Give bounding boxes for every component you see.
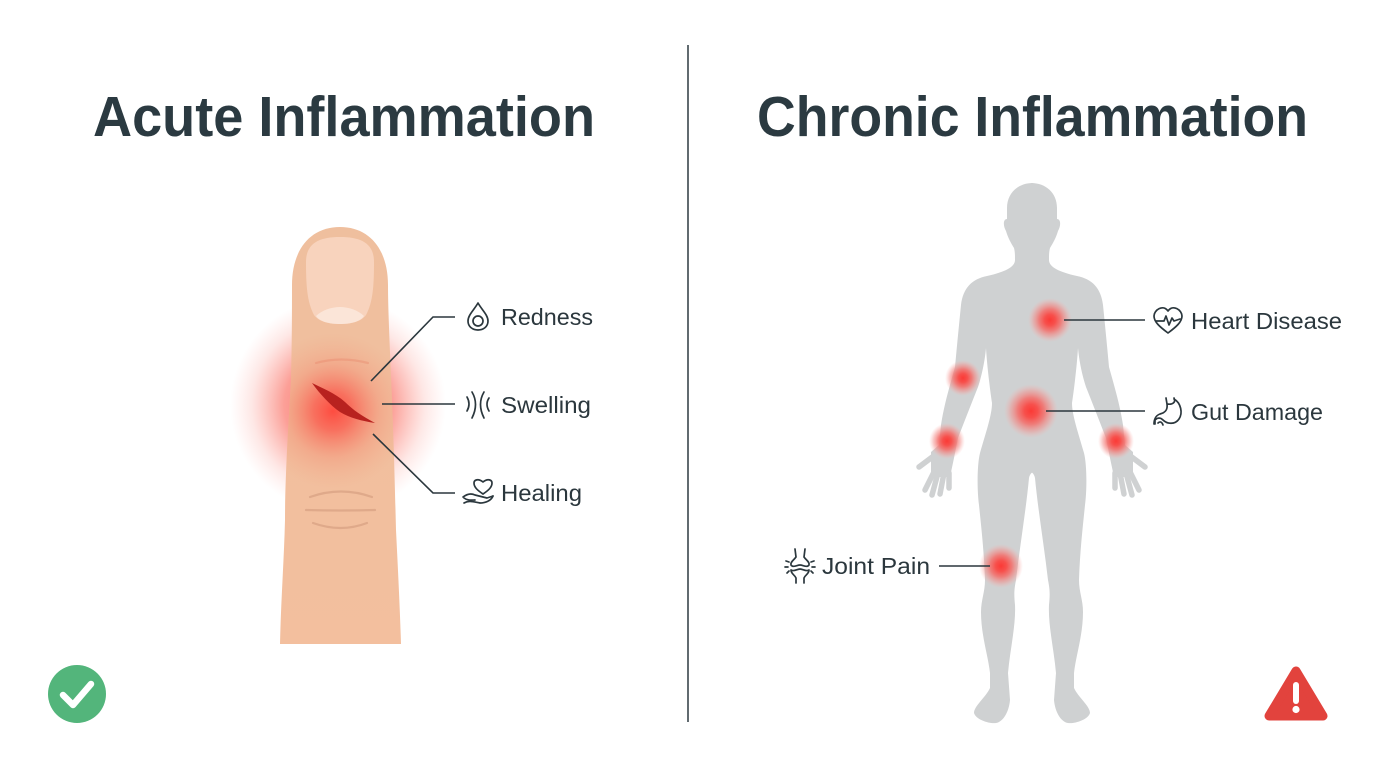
body silhouette bbox=[919, 183, 1145, 723]
badge: warning triangle bbox=[1269, 671, 1323, 716]
panel: chronic body illustration bbox=[919, 183, 1145, 723]
label: Gut Damage: Gut Damage bbox=[1191, 399, 1323, 425]
knuckle creases bbox=[306, 360, 375, 528]
label: Swelling: Swelling bbox=[501, 392, 591, 418]
icon: stomach bbox=[1154, 398, 1181, 425]
hotspot: abdomen bbox=[1004, 384, 1058, 438]
callout: Gut Damage bbox=[1046, 398, 1323, 425]
fingernail bbox=[306, 237, 374, 324]
callout: Healing bbox=[373, 434, 582, 506]
badge: green check bbox=[48, 665, 106, 723]
callout: Redness bbox=[371, 303, 593, 381]
label: Heart Disease: Heart Disease bbox=[1191, 308, 1342, 334]
hotspot: forearm bbox=[945, 360, 981, 396]
hotspot: left wrist bbox=[929, 423, 965, 459]
title: Acute Inflammation: Acute Inflammation bbox=[93, 85, 595, 149]
wound cut bbox=[312, 383, 375, 423]
icon: heart in hand bbox=[463, 480, 493, 503]
icon: heart with pulse bbox=[1154, 308, 1182, 333]
callout: Joint Pain bbox=[785, 549, 990, 583]
label: Redness: Redness bbox=[501, 304, 593, 330]
callout: Heart Disease bbox=[1064, 308, 1342, 334]
label: Healing: Healing bbox=[501, 480, 582, 506]
finger bbox=[280, 227, 401, 644]
divider between panels bbox=[687, 45, 689, 722]
nail lunula bbox=[316, 307, 364, 324]
panel: acute finger illustration bbox=[230, 227, 446, 644]
hotspot: right wrist bbox=[1098, 423, 1134, 459]
title: Chronic Inflammation: Chronic Inflammation bbox=[757, 85, 1308, 149]
icon: water drop bbox=[468, 303, 488, 330]
icon: knee joint bbox=[785, 549, 815, 583]
hotspot: chest bbox=[1028, 298, 1072, 342]
label: Joint Pain: Joint Pain bbox=[822, 553, 930, 579]
icon: swelling arcs bbox=[467, 392, 489, 418]
callout: Swelling bbox=[382, 392, 591, 418]
inner inflammation glow on finger bbox=[287, 349, 392, 474]
hotspot: knee bbox=[979, 544, 1023, 588]
outer inflammation glow bbox=[230, 297, 446, 513]
